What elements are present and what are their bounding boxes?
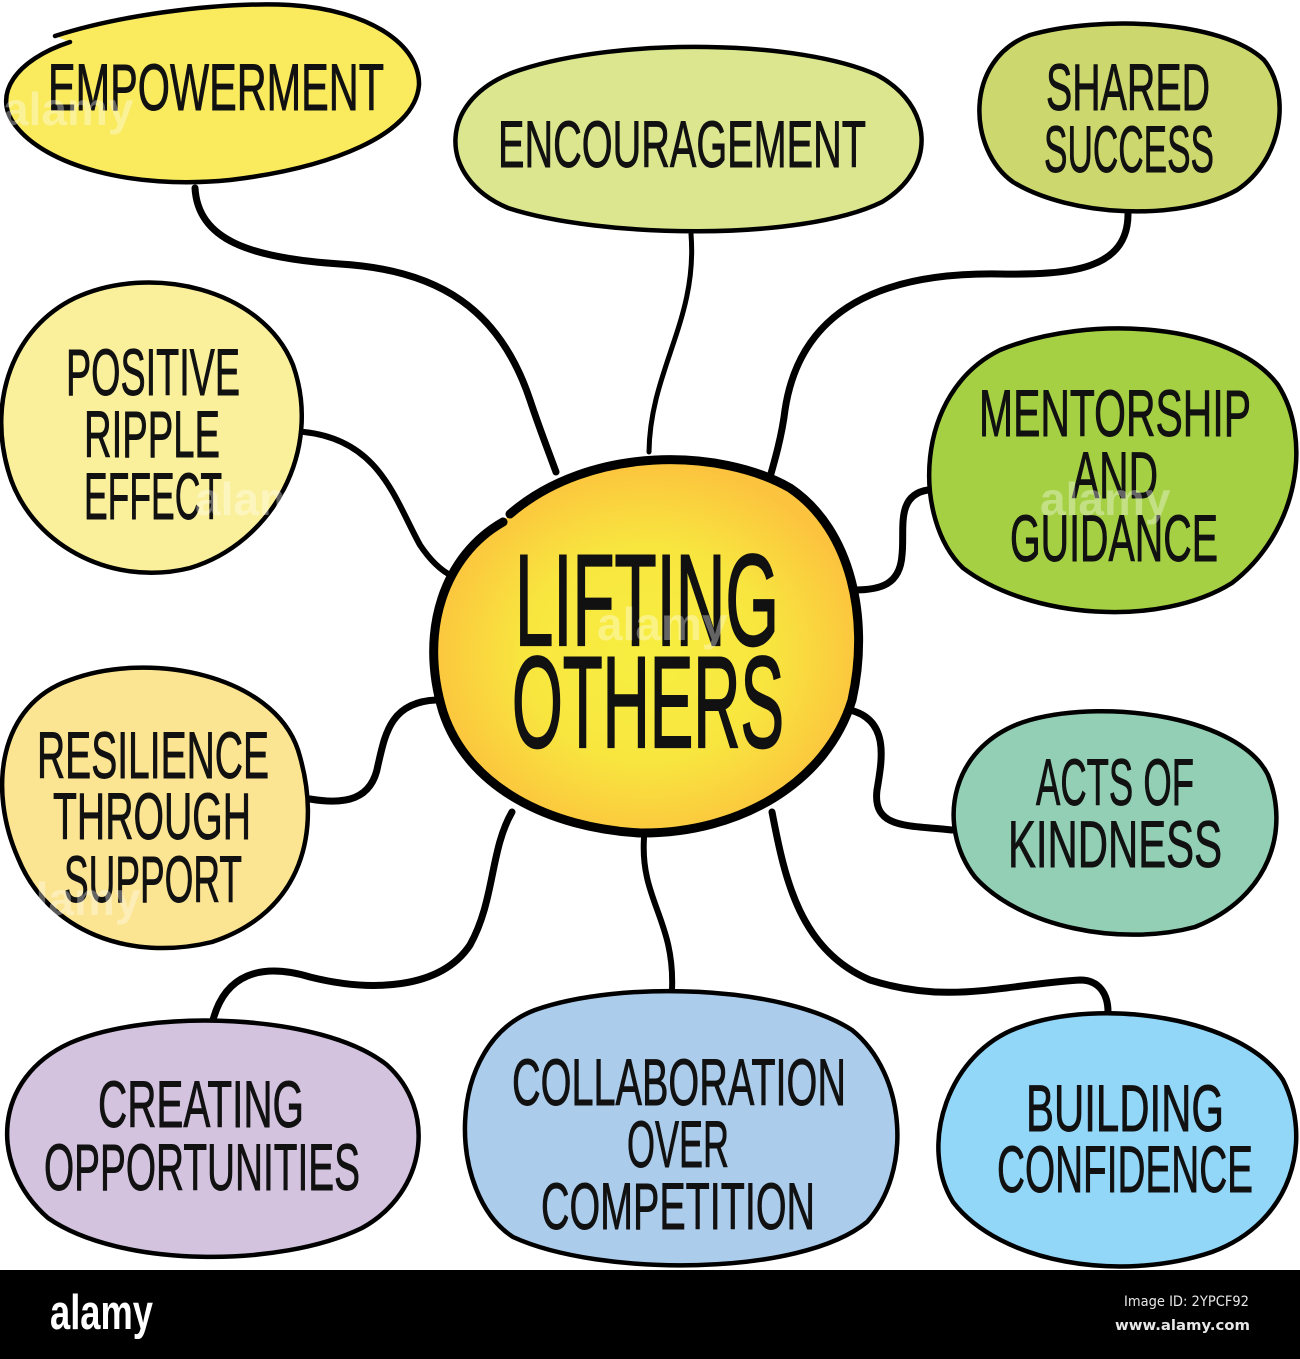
node: empowerment — [6, 4, 419, 182]
node: positive ripple effect: POSITIVE — [66, 335, 240, 409]
center: lifting others: OTHERS — [512, 629, 784, 775]
watermarks: alamy — [597, 598, 728, 650]
node: encouragement: ENCOURAGEMENT — [498, 107, 866, 181]
node: resilience through support: SUPPORT — [64, 842, 242, 916]
node: shared success — [979, 24, 1280, 211]
node: positive ripple effect: EFFECT — [84, 459, 222, 533]
node: mentorship and guidance — [929, 328, 1296, 612]
node: mentorship and guidance: AND — [1072, 438, 1158, 512]
node: acts of kindness — [954, 711, 1276, 935]
node: creating opportunities: OPPORTUNITIES — [44, 1130, 360, 1204]
footer logo: alamy — [50, 1286, 153, 1340]
node: empowerment: EMPOWERMENT — [48, 50, 384, 124]
node: collaboration over competition: OVER — [627, 1107, 729, 1181]
node: collaboration over competition: COMPETITION — [541, 1169, 815, 1243]
node: resilience through support: RESILIENCE — [37, 718, 269, 792]
footer image id: Image ID: 2YPCF92 — [1124, 1294, 1249, 1310]
watermarks: alamy — [195, 473, 326, 525]
watermarks — [3, 83, 1171, 925]
node: creating opportunities: CREATING — [98, 1067, 304, 1141]
watermarks: alamy — [1040, 473, 1171, 525]
center: lifting others: LIFTING — [515, 527, 779, 673]
connectors — [195, 188, 1128, 1020]
node: positive ripple effect: RIPPLE — [84, 397, 220, 471]
footer bar — [0, 1270, 1300, 1359]
footer url: www.alamy.com — [1115, 1318, 1250, 1334]
node: collaboration over competition — [465, 991, 897, 1265]
watermarks: alamy — [3, 83, 134, 135]
node: resilience through support: THROUGH — [53, 779, 251, 853]
node: positive ripple effect — [1, 282, 302, 573]
node: creating opportunities — [7, 1021, 419, 1257]
watermarks: alamy — [10, 873, 141, 925]
center: lifting others — [434, 460, 859, 833]
node: encouragement — [455, 47, 922, 231]
node: resilience through support — [2, 668, 308, 948]
node: building confidence — [938, 1013, 1296, 1266]
node: collaboration over competition: COLLABORATION — [512, 1045, 846, 1119]
